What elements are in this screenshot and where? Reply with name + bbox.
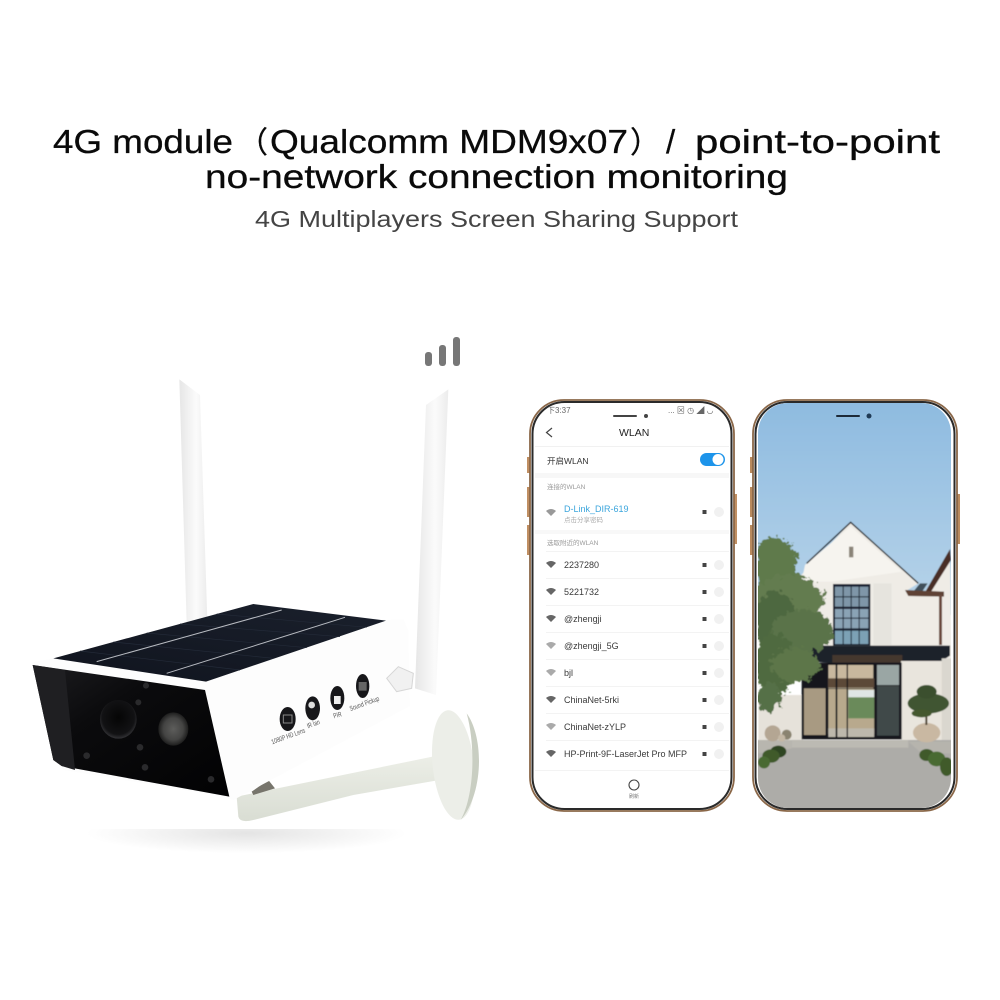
app screen: D-Link_DIR-619 (564, 504, 629, 514)
network names: bjl (564, 668, 573, 678)
side buttons (527, 457, 737, 555)
camera (32, 379, 480, 853)
phone right (750, 400, 960, 812)
phone frame (530, 400, 734, 811)
app screen: 刷新 (629, 793, 639, 800)
house upper wall (785, 522, 952, 658)
house photo (753, 402, 955, 812)
title: no-network connection monitoring (205, 158, 788, 195)
network names: ChinaNet-5rki (564, 695, 619, 705)
refresh button (629, 780, 639, 790)
camera front face (33, 665, 229, 797)
network names: @zhengji_5G (564, 641, 619, 651)
phone frame (753, 400, 957, 811)
shrubs (758, 746, 953, 776)
network names: ChinaNet-zYLP (564, 722, 626, 732)
connected section: 连接的WLAN (547, 482, 586, 491)
app screen: ... ⊠ ◷ ◢ ◡ (668, 406, 714, 415)
paving (755, 740, 952, 812)
title: ） (630, 127, 660, 160)
feature labels: PIR (333, 710, 343, 721)
wifi icons (546, 509, 556, 757)
locks and chevrons (702, 510, 706, 756)
header: WLAN (619, 427, 649, 439)
right antenna (415, 389, 448, 695)
potted plant (908, 685, 949, 742)
roof lines (807, 522, 918, 583)
row dividers (535, 551, 729, 771)
network names: HP-Print-9F-LaserJet Pro MFP (564, 749, 687, 759)
title: 4G module (53, 123, 233, 160)
wall bracket (237, 708, 480, 822)
feature icons (280, 674, 369, 731)
icon: signal bars (425, 337, 460, 366)
network names: 2237280 (564, 560, 599, 570)
sky (755, 402, 955, 615)
lower walls (901, 661, 951, 743)
feature labels (270, 695, 381, 746)
status bar: 下3:37 (547, 406, 571, 415)
feature labels: IR lan (306, 718, 321, 730)
nearby section: 选取附近的WLAN (547, 538, 599, 547)
stone spheres (765, 725, 792, 742)
title: Qualcomm MDM9x07 (270, 123, 628, 160)
tree (753, 537, 833, 712)
side buttons (750, 457, 960, 555)
solar panel (53, 604, 386, 682)
phone left (527, 400, 737, 811)
earpiece (836, 414, 872, 418)
feature labels: Sound Pickup (349, 695, 381, 713)
app screen (535, 406, 729, 800)
subtitle: 4G Multiplayers Screen Sharing Support (255, 206, 739, 232)
network names: @zhengji (564, 614, 602, 624)
camera body (32, 604, 410, 800)
title: （ (238, 127, 268, 160)
antenna joint (387, 667, 413, 692)
title: point-to-point (695, 123, 940, 160)
floor shadow (135, 829, 358, 848)
feature labels: 1080P HD Lens (270, 727, 306, 746)
left antenna (179, 379, 207, 623)
canopy (782, 646, 950, 663)
secondary lens (158, 712, 188, 746)
title (53, 123, 940, 195)
network names: 5221732 (564, 587, 599, 597)
glass entrance (802, 663, 902, 739)
main lens (100, 700, 137, 739)
title: / (666, 123, 676, 160)
wifi toggle row: 开启WLAN (547, 456, 589, 466)
app screen: 点击分享密码 (564, 515, 604, 524)
upper window (833, 584, 870, 646)
network names (564, 560, 687, 759)
